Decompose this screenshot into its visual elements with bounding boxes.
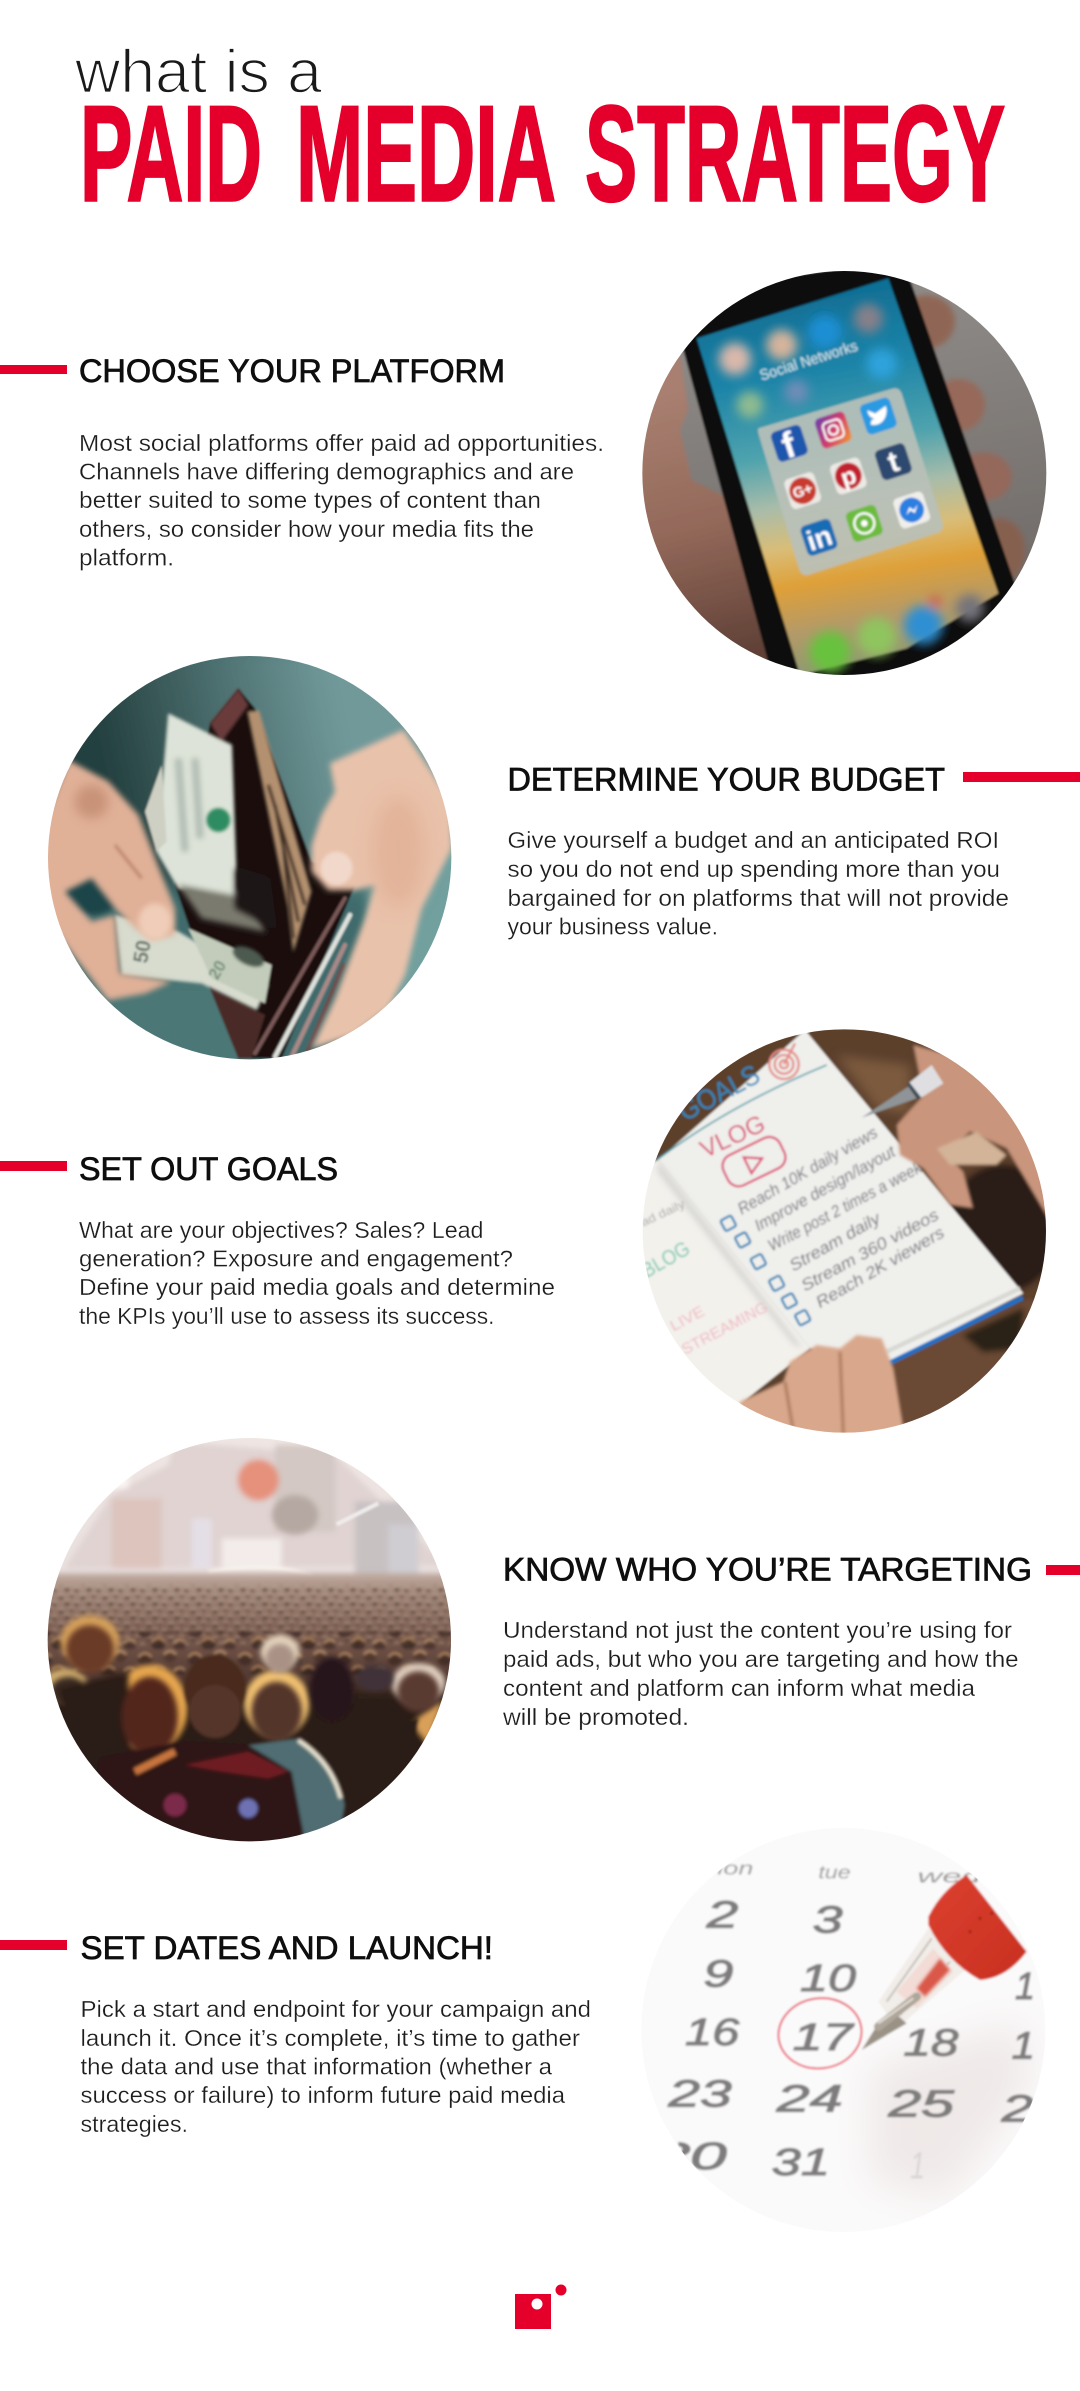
body text: Channels have differing demographics and are: [79, 459, 574, 485]
accent bar: [0, 1940, 67, 1950]
handwritten: checklist: Stream daily: [786, 1208, 885, 1275]
checkboxes: [720, 1215, 811, 1326]
photo: hands opening wallet: 20: [204, 957, 230, 983]
accent bar: [1046, 1565, 1080, 1575]
calendar dates: 2: [1000, 2088, 1033, 2131]
body text: Most social platforms offer paid ad opportunities.: [79, 430, 604, 456]
icon: facebook: f: [776, 424, 801, 467]
fade over clipped number: [643, 2132, 678, 2182]
handwritten: checklist: Reach 10K daily views: [734, 1123, 881, 1218]
body text: the data and use that information (whether a: [80, 2054, 552, 2080]
body text: the KPIs you’ll use to assess its success.: [79, 1303, 494, 1329]
panel: set out goals: [0, 1015, 1060, 1448]
title line: paid media strategy: PAID: [80, 78, 262, 230]
body text: better suited to some types of content than: [79, 487, 541, 513]
handwritten: vlog: VLOG: [696, 1110, 769, 1164]
left page writing: [643, 1201, 768, 1354]
calendar dates: 24: [775, 2078, 843, 2121]
left page writing: ad daily: [639, 1197, 687, 1229]
body text: platform.: [79, 544, 174, 570]
icon: pinterest: [829, 456, 868, 496]
body text: [502, 1617, 1019, 1730]
handwritten: goals: GOALS: [673, 1059, 765, 1127]
icon: target: [769, 1043, 799, 1079]
icon: linkedin: in: [803, 520, 836, 557]
calendar dates: 16: [685, 2011, 740, 2054]
body text: bargained for on platforms that will not provide: [508, 885, 1009, 911]
banknotes: [157, 713, 248, 905]
crowd: [48, 1570, 451, 1701]
heading: DETERMINE YOUR BUDGET: [508, 762, 945, 798]
pen: [862, 1875, 1027, 2050]
body text: [80, 1996, 591, 2137]
photo: calendar with red pen: [666, 1862, 1044, 2210]
photo: phone with social apps: [642, 271, 1046, 675]
panel: set dates and launch: [0, 1862, 1044, 2210]
heading: SET OUT GOALS: [79, 1151, 338, 1187]
calendar dates: 17: [793, 2016, 855, 2059]
panel: know who you're targeting: [35, 1425, 1080, 1858]
left hand: [35, 760, 175, 1000]
handwritten: checklist: Reach 2K viewers: [812, 1223, 948, 1312]
logo outer dot: [556, 2284, 566, 2296]
calendar dates: 30: [653, 2135, 727, 2178]
calendar dates: 1: [1012, 2024, 1035, 2067]
red date circle: [774, 1993, 866, 2074]
handwritten: checklist: Improve design/layout: [751, 1141, 900, 1235]
title line: paid media strategy: MEDIA: [296, 78, 556, 230]
photo: hands opening wallet: 50: [129, 938, 156, 965]
handwritten: checklist: Write post 2 times a week: [765, 1157, 926, 1255]
wallet card stripes: [255, 898, 350, 1057]
icon: messenger: [892, 490, 931, 530]
handwritten: checklist: [734, 1123, 948, 1312]
icon: google plus: G+: [791, 481, 815, 502]
calendar dates: 25: [887, 2083, 955, 2126]
icon: tumblr: [873, 442, 913, 483]
accent bar: [0, 365, 67, 374]
body text: Pick a start and endpoint for your campaign and: [80, 1996, 591, 2022]
calendar dates: 18: [903, 2022, 959, 2065]
title line: paid media strategy: [80, 78, 1005, 230]
left page writing: STREAMING: [679, 1299, 771, 1359]
writing hand: [897, 1045, 1050, 1222]
weekday labels: [717, 1863, 979, 1884]
body text: What are your objectives? Sales? Lead: [79, 1217, 484, 1243]
panel: choose your platform: [0, 260, 1060, 693]
heading: SET DATES AND LAUNCH!: [80, 1930, 493, 1966]
weekday labels: wed: [917, 1865, 982, 1886]
title line: what is a: what is a: [74, 38, 322, 106]
icon: whatsapp: [845, 504, 884, 543]
body text: Give yourself a budget and an anticipated ROI: [508, 827, 999, 853]
holding hand: [738, 1333, 905, 1433]
calendar dates: [653, 1894, 1035, 2187]
body text: paid ads, but who you are targeting and how the: [503, 1646, 1019, 1672]
right hand: [312, 730, 452, 1048]
heading: KNOW WHO YOU’RE TARGETING: [503, 1552, 1032, 1588]
body text: [79, 430, 604, 570]
body text: [79, 1217, 555, 1329]
icon: tumblr: t: [884, 445, 903, 479]
body text: your business value.: [508, 914, 718, 940]
panel: determine your budget: [35, 645, 1080, 1075]
icon: video play box: [719, 1133, 789, 1190]
icon: twitter: [859, 396, 898, 436]
calendar dates: 31: [772, 2141, 830, 2184]
icon: google plus: [783, 471, 822, 510]
pen: [862, 1087, 917, 1118]
body text: content and platform can inform what media: [503, 1675, 975, 1701]
left page writing: LIVE: [667, 1303, 708, 1335]
weekday labels: ion: [717, 1857, 753, 1878]
accent bar: [0, 1161, 67, 1171]
icon: pinterest: p: [838, 462, 860, 492]
wallet: [175, 688, 357, 1058]
weekday labels: tue: [818, 1861, 851, 1882]
notebook pages: [642, 1158, 811, 1404]
icon: facebook: [770, 424, 809, 463]
heading: CHOOSE YOUR PLATFORM: [79, 353, 505, 389]
calendar dates: 1: [910, 2144, 925, 2187]
calendar dates: 2: [705, 1894, 738, 1937]
footer logo: [515, 2284, 566, 2329]
accent bar: [963, 772, 1080, 782]
calendar dates: 9: [703, 1953, 733, 1996]
folder label: Social Networks: [758, 338, 860, 384]
logo square: [515, 2294, 551, 2329]
body text: Understand not just the content you’re using for: [503, 1617, 1012, 1643]
logo inner dot: [532, 2298, 542, 2310]
body text: strategies.: [80, 2111, 188, 2137]
title: [74, 38, 1005, 230]
photo: goals notebook: [642, 1029, 1046, 1433]
body text: success or failure) to inform future paid media: [80, 2082, 565, 2108]
calendar dates: 1: [1015, 1965, 1035, 2008]
header rule: [657, 1065, 827, 1160]
calendar dates: 3: [813, 1898, 843, 1941]
body text: others, so consider how your media fits the: [79, 516, 534, 542]
body text: will be promoted.: [502, 1704, 689, 1730]
body text: so you do not end up spending more than you: [508, 856, 1000, 882]
photo: hands opening wallet: [48, 656, 452, 1060]
body text: generation? Exposure and engagement?: [79, 1246, 513, 1272]
handwritten: checklist: Stream 360 videos: [798, 1205, 942, 1295]
icon: instagram: [814, 410, 853, 450]
calendar dates: 10: [800, 1957, 856, 2000]
body text: Define your paid media goals and determine: [79, 1274, 555, 1300]
body text: launch it. Once it’s complete, it’s time to gather: [80, 2025, 580, 2051]
wallet page edges: [248, 710, 311, 952]
body text: [508, 827, 1009, 940]
photo: crowd on a city street: [48, 1438, 451, 1842]
left page writing: BLOG: [638, 1237, 694, 1283]
calendar dates: 23: [667, 2073, 732, 2116]
